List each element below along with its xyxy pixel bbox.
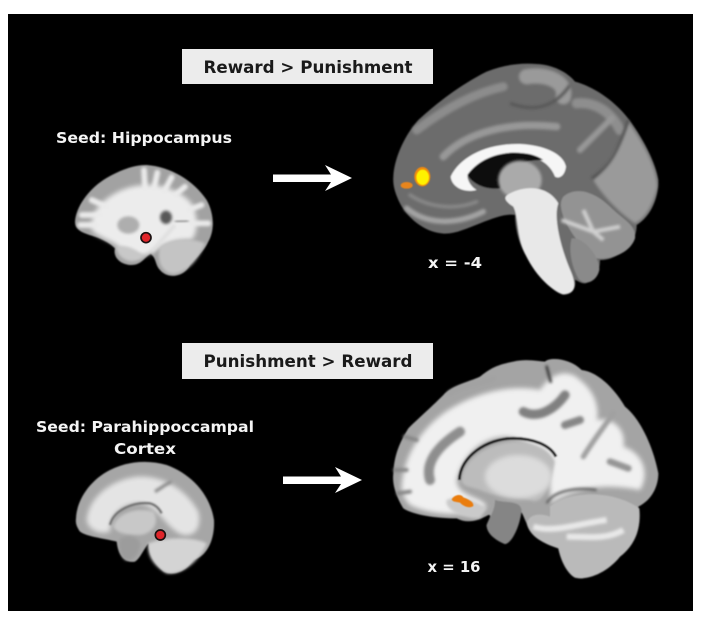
occipital lobe	[593, 122, 657, 223]
cortex outline	[393, 64, 658, 295]
cerebellum	[561, 191, 635, 259]
cerebellum	[527, 494, 640, 578]
brainstem	[487, 500, 522, 544]
small brain: parahippocampal seed	[76, 462, 214, 574]
basal ganglia	[462, 442, 555, 501]
ventricle	[459, 438, 556, 480]
large brain: x = 16	[393, 359, 658, 578]
heading: Punishment > Reward	[182, 343, 433, 379]
seed marker	[141, 233, 151, 243]
label: Seed Parahippocampal Cortex: Seed: Parahippoccampal	[36, 418, 254, 436]
cortex outline	[393, 359, 658, 578]
sulcus	[510, 85, 570, 108]
large brain: x = -4	[393, 64, 658, 295]
corpus callosum	[110, 503, 162, 525]
activation cluster	[452, 495, 473, 507]
small brain: hippocampus seed	[75, 165, 213, 276]
label: Seed Parahippocampal Cortex	[36, 418, 254, 458]
heading: Reward > Punishment: Reward > Punishment	[204, 58, 413, 77]
cerebellum	[159, 240, 205, 274]
cerebellum	[148, 538, 207, 573]
label: Seed Parahippocampal Cortex: Cortex	[114, 440, 176, 458]
white matter	[402, 373, 645, 514]
corpus callosum	[451, 144, 566, 191]
arrow: bottom	[283, 467, 362, 493]
grey sulci	[395, 367, 628, 493]
gyri highlights	[407, 76, 620, 221]
arrow: top	[273, 165, 352, 191]
label: x = 16: x = 16	[428, 558, 480, 576]
ventricle	[467, 153, 543, 189]
brainstem	[505, 188, 574, 294]
heading: Reward > Punishment	[182, 49, 433, 84]
label: Seed Hippocampus: Seed: Hippocampus	[56, 129, 232, 147]
ventricle	[160, 211, 172, 224]
label: x = -4: x = -4	[428, 254, 482, 272]
heading: Punishment > Reward: Punishment > Reward	[204, 352, 412, 371]
thalamus grey patch	[117, 216, 139, 234]
activation clusters	[401, 167, 430, 189]
brainstem	[119, 536, 140, 560]
thalamus	[498, 161, 542, 199]
seed marker	[155, 530, 165, 540]
